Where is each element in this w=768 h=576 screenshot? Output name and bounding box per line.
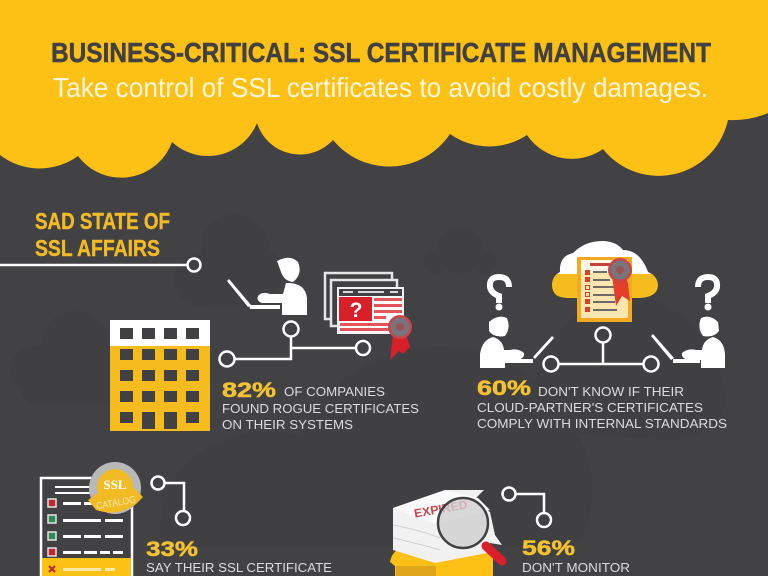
stat text: 60%: DON'T KNOW IF THEIR <box>538 384 684 399</box>
icon: person at laptop <box>227 258 307 315</box>
icon: SSL catalog list: SSL <box>103 477 127 492</box>
icon: left question mark <box>490 277 509 310</box>
expired stamp: EXPIRED <box>413 497 469 521</box>
connector: third stat <box>152 476 190 525</box>
subtitle: Take control of SSL certificates to avoid costly damages. <box>53 72 708 103</box>
connector: first stat <box>220 322 370 366</box>
connector: second stat <box>544 328 658 372</box>
question mark: ? <box>350 299 362 322</box>
icon: right question mark <box>698 277 717 310</box>
connector: fourth stat <box>502 488 551 527</box>
stat text: 60% <box>477 377 727 431</box>
section heading <box>35 208 170 261</box>
stat text: 82%: FOUND ROGUE CERTIFICATES <box>222 401 419 416</box>
stat text: 82%: 82% <box>222 379 276 402</box>
badge <box>89 462 141 514</box>
header cloud <box>0 0 768 178</box>
stat text: 56% <box>522 537 630 575</box>
seal <box>608 258 632 282</box>
icon: folder with expired papers and magnifier <box>390 490 502 576</box>
stat text: 60%: CLOUD-PARTNER'S CERTIFICATES <box>477 400 703 415</box>
stat text: 33%: 33% <box>146 538 198 561</box>
icon: SSL catalog list <box>41 462 143 576</box>
icon: cloud with certificate <box>550 240 660 322</box>
stat text: 33%: SAY THEIR SSL CERTIFICATE <box>146 560 332 575</box>
section heading: SSL AFFAIRS <box>35 235 160 261</box>
background faint clouds <box>11 214 725 546</box>
icon: right person <box>651 317 725 368</box>
stat text: 56%: 56% <box>522 537 575 560</box>
stat text: 82%: ON THEIR SYSTEMS <box>222 417 353 432</box>
stat text: 60%: COMPLY WITH INTERNAL STANDARDS <box>477 416 727 431</box>
icon: building <box>110 320 210 431</box>
icon: SSL catalog list: CATALOG <box>95 495 137 512</box>
icon: left person <box>480 317 554 368</box>
stat text: 82%: OF COMPANIES <box>284 384 385 399</box>
stat text: 82% <box>222 379 419 432</box>
section connector <box>0 258 200 272</box>
stat text: 60%: 60% <box>477 377 531 400</box>
icon: stacked rogue certificates <box>325 273 412 360</box>
stat text: 33% <box>146 538 332 575</box>
stat text: 56%: DON'T MONITOR <box>522 560 630 575</box>
seal <box>390 334 410 360</box>
section heading: SAD STATE OF <box>35 208 170 234</box>
